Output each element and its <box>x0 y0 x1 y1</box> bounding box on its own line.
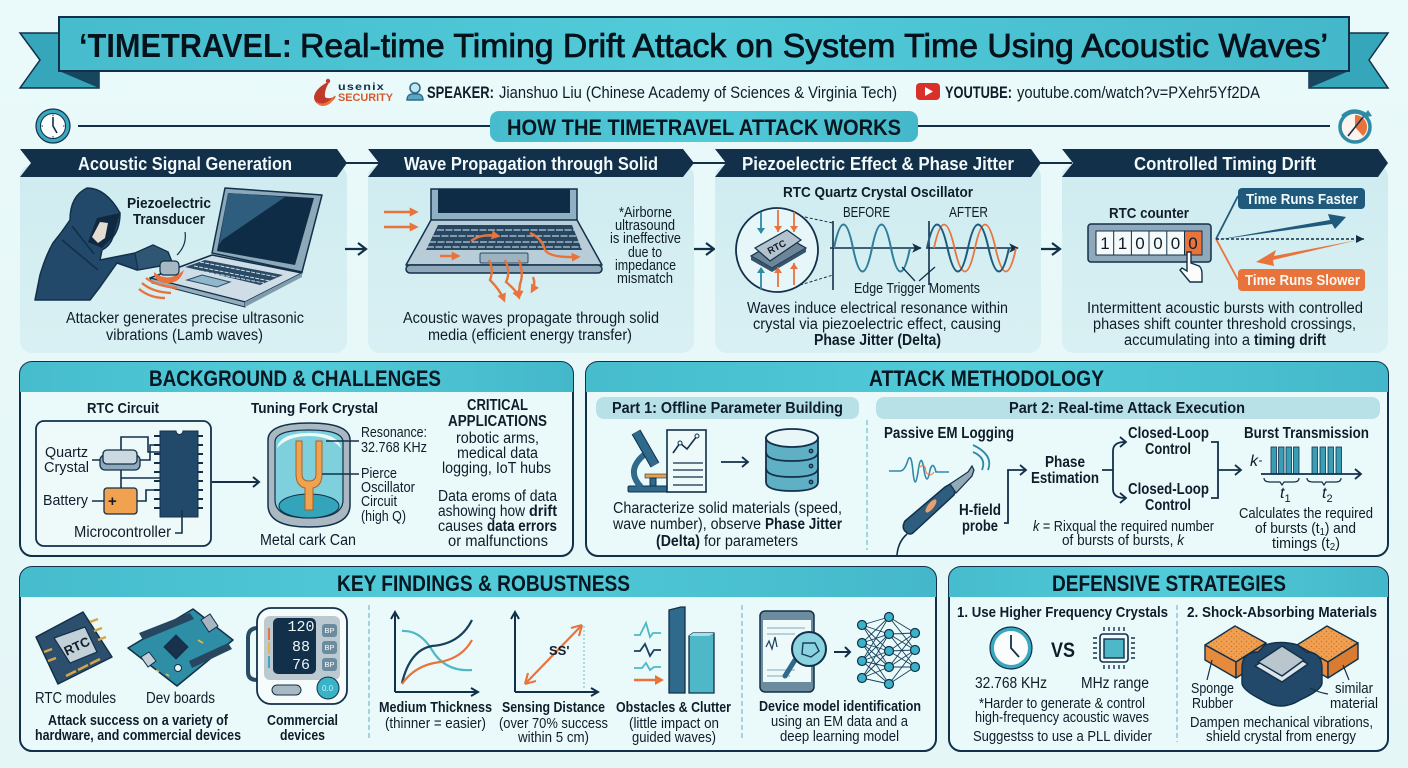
RTC counter <box>1088 205 1211 262</box>
label: phase estimation <box>1031 454 1099 487</box>
arrow: document to database <box>721 457 748 467</box>
heading <box>949 567 1388 597</box>
section heading: how the attack works <box>78 111 1330 142</box>
chart: burst transmission: k <box>1250 453 1259 470</box>
part 1 header: Part 1: Offline Parameter Building <box>612 400 843 417</box>
diagram: RTC circuit: Crystal <box>44 460 89 476</box>
note: airborne ultrasound <box>610 205 681 287</box>
panel: defensive strategies <box>949 567 1388 751</box>
text: critical applications: logging, IoT hubs <box>442 460 551 477</box>
description <box>66 310 304 344</box>
icon: crystal magnifier <box>736 208 833 292</box>
label: piezoelectric transducer: Transducer <box>133 211 205 228</box>
description: crystal via piezoelectric effect, causing <box>753 316 1001 333</box>
note: airborne ultrasound: *Airborne <box>619 205 672 221</box>
diagram: tuning fork crystal: Resonance: <box>361 425 427 441</box>
chart: burst transmission: Calculates the required <box>1239 506 1373 522</box>
labels: sponge rubber and similar material <box>1191 681 1378 712</box>
RTC counter: 1 <box>1100 234 1110 253</box>
diagram: passive EM logging and probe: probe <box>962 518 998 535</box>
icon: pointing hand <box>1180 252 1202 282</box>
description part 1: Characterize solid materials (speed, <box>613 500 842 517</box>
text: critical applications: Data eroms of data <box>438 488 557 505</box>
description: Phase Jitter (Delta) <box>814 332 941 349</box>
heading: KEY FINDINGS & ROBUSTNESS <box>337 571 630 596</box>
captions: hardware: devices <box>280 728 325 744</box>
icon: mhz chip <box>1093 627 1135 669</box>
icon: usenix logo: SECURITY <box>338 92 394 104</box>
text: frequency crystals detail: 32.768 KHz <box>975 675 1047 692</box>
chart: burst transmission: of bursts (t <box>1255 521 1324 537</box>
heading <box>20 567 936 597</box>
chart: sensing distance: within 5 cm) <box>517 730 589 746</box>
RTC counter: RTC counter <box>1109 205 1189 222</box>
diagram: tuning fork crystal: Metal cark Can <box>260 532 356 549</box>
description part 1: Phase Jitter <box>765 516 842 533</box>
description part 1: for parameters <box>704 533 798 550</box>
panel: acoustic signal generation <box>20 149 347 353</box>
label: edge trigger moments <box>854 267 980 297</box>
chart: wave after: AFTER <box>949 205 988 221</box>
diagram: tuning fork crystal: (high Q) <box>361 509 406 525</box>
chart: sensing distance: SS' <box>549 643 569 658</box>
chart: wave before: BEFORE <box>843 205 890 221</box>
diagram: RTC circuit: Microcontroller <box>74 524 171 541</box>
chart: burst transmission: ) and <box>1325 521 1356 537</box>
description: shield crystal from energy <box>1206 729 1357 745</box>
panel: controlled timing drift <box>1062 149 1388 353</box>
illustration: attacker with transducer and laptop <box>35 188 322 307</box>
label: piezoelectric transducer <box>127 195 211 228</box>
label: phase estimation: Estimation <box>1031 470 1099 487</box>
title banner <box>20 17 1388 88</box>
description: vibrations (Lamb waves) <box>106 327 263 344</box>
icon: blood pressure monitor: 88 <box>292 639 310 656</box>
icon: obstacles and clutter: guided waves) <box>632 730 716 746</box>
diagram: RTC circuit: Battery <box>43 493 89 509</box>
description: Intermittent acoustic bursts with controlled <box>1087 300 1363 317</box>
text: critical applications: drift <box>529 503 557 520</box>
icon: clock with arrow right <box>1340 110 1372 142</box>
diagram: tuning fork crystal: Pierce <box>361 466 397 482</box>
icon: neural network <box>858 612 920 688</box>
icon: usenix logo: usenix <box>338 81 385 93</box>
description: Waves induce electrical resonance within <box>747 300 1008 317</box>
title banner: ‘TIMETRAVEL: <box>79 28 292 65</box>
chart: burst transmission: t <box>1280 485 1284 502</box>
arrow: probe to phase estimation <box>1004 465 1026 523</box>
description part 1 <box>612 500 842 550</box>
captions: hardware: Commercial <box>267 713 338 729</box>
diagram: passive EM logging and probe: H-field <box>959 502 1001 519</box>
icon: blood pressure monitor: BP <box>324 660 335 669</box>
text: vs: VS <box>1051 639 1075 662</box>
icon: sponge blocks and crystal <box>1205 626 1358 706</box>
diagram: tuning fork crystal: Circuit <box>361 494 397 510</box>
ribbon heading: Wave Propagation through Solid <box>404 154 658 174</box>
arrow: step 1 to 2 <box>345 243 366 255</box>
icon: usenix logo <box>314 79 394 106</box>
ribbon heading <box>368 149 694 177</box>
diagram: RTC circuit: RTC Circuit <box>87 400 159 417</box>
ribbon heading <box>20 149 347 177</box>
text: critical applications: or malfunctions <box>448 533 548 550</box>
icon: clock <box>990 627 1032 669</box>
icon: youtube <box>916 83 940 100</box>
RTC counter: 0 <box>1153 234 1163 253</box>
chart: burst transmission: 1 <box>1320 527 1325 538</box>
captions: hardware: Dev boards <box>146 690 215 707</box>
diagram: RTC circuit: + <box>108 493 117 510</box>
callout: time runs slower <box>1238 269 1365 291</box>
description: timing drift <box>1254 332 1326 349</box>
chart: burst transmission: ) <box>1335 536 1340 552</box>
description: media (efficient energy transfer) <box>428 327 632 344</box>
icon: blood pressure monitor: BP <box>324 626 335 635</box>
caption: device model identification: Device model identification <box>759 699 921 715</box>
subheading 1: 1. Use Higher Frequency Crystals <box>957 604 1168 621</box>
formula note: of bursts of bursts, k <box>1062 533 1185 549</box>
chart: burst transmission: 1 <box>1284 493 1291 505</box>
text: critical applications: medical data <box>457 445 538 462</box>
text: frequency crystals detail: *Harder to generate & control <box>979 696 1145 712</box>
labels: sponge rubber and similar material: similar <box>1335 681 1373 697</box>
text: frequency crystals detail: MHz range <box>1081 675 1149 692</box>
description <box>1087 300 1363 349</box>
icon: blood pressure monitor: BP <box>324 643 335 652</box>
ribbon heading: Acoustic Signal Generation <box>78 154 292 174</box>
text: frequency crystals detail <box>973 675 1152 745</box>
caption: device model identification <box>759 699 921 745</box>
chart: sensing distance: Sensing Distance <box>502 700 605 716</box>
ribbon heading: Piezoelectric Effect & Phase Jitter <box>742 154 1014 174</box>
description: phases shift counter threshold crossings, <box>1093 316 1356 333</box>
branching arrows: closed-loop control: Control <box>1145 441 1191 458</box>
chart: burst transmission: timings (t <box>1272 536 1331 552</box>
description part 1: (Delta) <box>656 533 700 550</box>
text: frequency crystals detail: high-frequency acoustic waves <box>975 710 1149 726</box>
captions: hardware: hardware, and commercial devices <box>35 728 241 744</box>
heading: ATTACK METHODOLOGY <box>869 366 1104 391</box>
youtube text: youtube.com/watch?v=PXehr5Yf2DA <box>1017 83 1261 102</box>
description: Dampen mechanical vibrations, <box>1190 715 1373 731</box>
icon: dev board <box>128 609 233 686</box>
panel: background and challenges <box>20 362 573 556</box>
arrow: step 2 to 3 <box>691 243 714 255</box>
subheading 2: 2. Shock-Absorbing Materials <box>1187 604 1377 621</box>
chart: burst transmission: t <box>1322 485 1326 502</box>
icon: microscope <box>628 432 668 492</box>
icon: database <box>766 429 818 491</box>
diagram: tuning fork crystal <box>251 400 427 549</box>
icon: blood pressure monitor <box>248 608 347 704</box>
icon: phone with magnifier <box>760 611 826 692</box>
arrow: phone to network <box>834 647 850 657</box>
section heading: how the attack works: HOW THE TIMETRAVEL ATTACK WORKS <box>507 115 901 140</box>
chart: burst transmission <box>1239 425 1373 553</box>
part 2 header <box>876 397 1380 419</box>
chart: burst transmission: 2 <box>1330 542 1336 553</box>
labels: sponge rubber and similar material: material <box>1330 696 1378 712</box>
text: critical applications: data errors <box>487 518 557 535</box>
caption: device model identification: using an EM data and a <box>771 714 909 730</box>
description: accumulating into a <box>1124 332 1250 349</box>
description <box>403 310 659 344</box>
label: piezoelectric transducer: Piezoelectric <box>127 195 211 212</box>
note: airborne ultrasound: ultrasound <box>615 218 675 234</box>
branching arrows: closed-loop control: Closed-Loop <box>1128 425 1209 442</box>
captions: hardware <box>35 690 338 744</box>
connector ribbons <box>345 162 1072 164</box>
drift arrows <box>1216 196 1364 280</box>
icon: crystal magnifier: RTC <box>766 238 788 257</box>
icon: document with graph <box>667 430 706 492</box>
chart: burst transmission: 2 <box>1326 493 1333 505</box>
captions: hardware: Attack success on a variety of <box>48 713 228 729</box>
chart: burst transmission: Burst Transmission <box>1244 425 1369 442</box>
youtube text <box>945 83 1261 102</box>
description: Acoustic waves propagate through solid <box>403 310 659 327</box>
panel: key findings <box>20 567 936 751</box>
label: phase estimation: Phase <box>1045 454 1085 471</box>
icon: clock left <box>36 109 70 143</box>
text: critical applications: ashowing how <box>438 503 526 520</box>
text: critical applications: robotic arms, <box>456 430 539 447</box>
description <box>1190 715 1373 745</box>
text: critical applications <box>438 397 557 550</box>
icon: blood pressure monitor: 76 <box>292 657 310 674</box>
diagram: RTC circuit: Quartz <box>45 445 88 461</box>
icon: speaker <box>407 83 423 100</box>
icon: obstacles and clutter: Obstacles & Clutter <box>616 700 731 716</box>
ribbon heading <box>1062 149 1388 177</box>
panel: piezoelectric effect <box>715 149 1041 353</box>
arrow: step 3 to 4 <box>1038 243 1060 255</box>
chart: sensing distance <box>499 612 608 746</box>
part 2 header: Part 2: Real-time Attack Execution <box>1009 400 1245 417</box>
panel: attack methodology <box>586 362 1388 556</box>
branching arrows: closed-loop control: Closed-Loop <box>1128 481 1209 498</box>
label: edge trigger moments: Edge Trigger Moments <box>854 281 980 297</box>
note: airborne ultrasound: mismatch <box>617 271 673 287</box>
description part 1: wave number), observe <box>612 516 761 533</box>
callout: time runs slower: Time Runs Slower <box>1245 272 1360 289</box>
arrow: circuit to crystal <box>212 477 259 487</box>
subtitle row <box>314 79 1261 106</box>
icon: blood pressure monitor: 120 <box>287 619 315 636</box>
text: critical applications: APPLICATIONS <box>448 413 547 430</box>
formula note: k = Rixqual the required number <box>1033 519 1214 535</box>
diagram: tuning fork crystal: 32.768 KHz <box>361 440 427 456</box>
icon: obstacles and clutter: (little impact on <box>629 716 719 732</box>
diagram: passive EM logging and probe <box>884 425 1014 555</box>
note: airborne ultrasound: due to <box>628 245 662 261</box>
icon: obstacles and clutter <box>616 607 731 746</box>
text: critical applications: causes <box>438 518 483 535</box>
ribbon heading <box>715 149 1041 177</box>
description: Attacker generates precise ultrasonic <box>66 310 304 327</box>
diagram: passive EM logging and probe: Passive EM Logging <box>884 425 1014 442</box>
callout: time runs faster: Time Runs Faster <box>1246 191 1358 208</box>
caption: device model identification: deep learning model <box>780 729 899 745</box>
chart: wave before <box>830 205 921 290</box>
speaker text: SPEAKER: <box>427 83 494 102</box>
RTC counter: 0 <box>1135 234 1145 253</box>
formula note <box>1033 519 1214 549</box>
icon: RTC module: RTC <box>62 633 93 659</box>
heading: DEFENSIVE STRATEGIES <box>1052 571 1286 596</box>
panel: wave propagation <box>368 149 694 353</box>
labels: sponge rubber and similar material: Sponge <box>1191 681 1234 697</box>
icon: blood pressure monitor: 0.0 <box>322 684 334 693</box>
heading <box>586 362 1388 392</box>
diagram: RTC circuit <box>36 400 211 546</box>
icon: RTC module <box>36 612 112 684</box>
chart: wave after <box>926 205 1018 285</box>
heading <box>20 362 573 392</box>
branching arrows: closed-loop control: Control <box>1145 497 1191 514</box>
labels: sponge rubber and similar material: Rubber <box>1192 696 1233 712</box>
note: airborne ultrasound: is ineffective <box>610 231 681 247</box>
ribbon heading: Controlled Timing Drift <box>1134 154 1316 174</box>
branching arrows: closed-loop control <box>1102 425 1241 514</box>
chart: medium thickness: (thinner = easier) <box>385 716 486 732</box>
note: airborne ultrasound: impedance <box>615 258 676 274</box>
description <box>747 300 1008 349</box>
RTC counter: 1 <box>1118 234 1127 253</box>
speaker text: Jianshuo Liu (Chinese Academy of Sciences & Virginia Tech) <box>499 83 897 102</box>
diagram: tuning fork crystal: Tuning Fork Crystal <box>251 400 378 417</box>
diagram: tuning fork crystal: Oscillator <box>361 480 415 496</box>
chart: medium thickness: Medium Thickness <box>379 700 492 716</box>
text: critical applications: CRITICAL <box>467 397 528 414</box>
heading: BACKGROUND & CHALLENGES <box>149 366 441 391</box>
text: frequency crystals detail: Suggestss to use a PLL divider <box>973 729 1152 745</box>
RTC counter: 0 <box>1188 234 1198 253</box>
chart: medium thickness <box>379 612 492 732</box>
title banner: Real-time Timing Drift Attack on System Time Using Acoustic Waves’ <box>300 28 1328 65</box>
illustration: laptop with wave arrows <box>384 189 602 300</box>
subheading: RTC Quartz Crystal Oscillator <box>783 184 973 201</box>
RTC counter: 0 <box>1171 234 1180 253</box>
chart: sensing distance: (over 70% success <box>499 716 608 732</box>
youtube text: YOUTUBE: <box>945 83 1012 102</box>
captions: hardware: RTC modules <box>35 690 116 707</box>
